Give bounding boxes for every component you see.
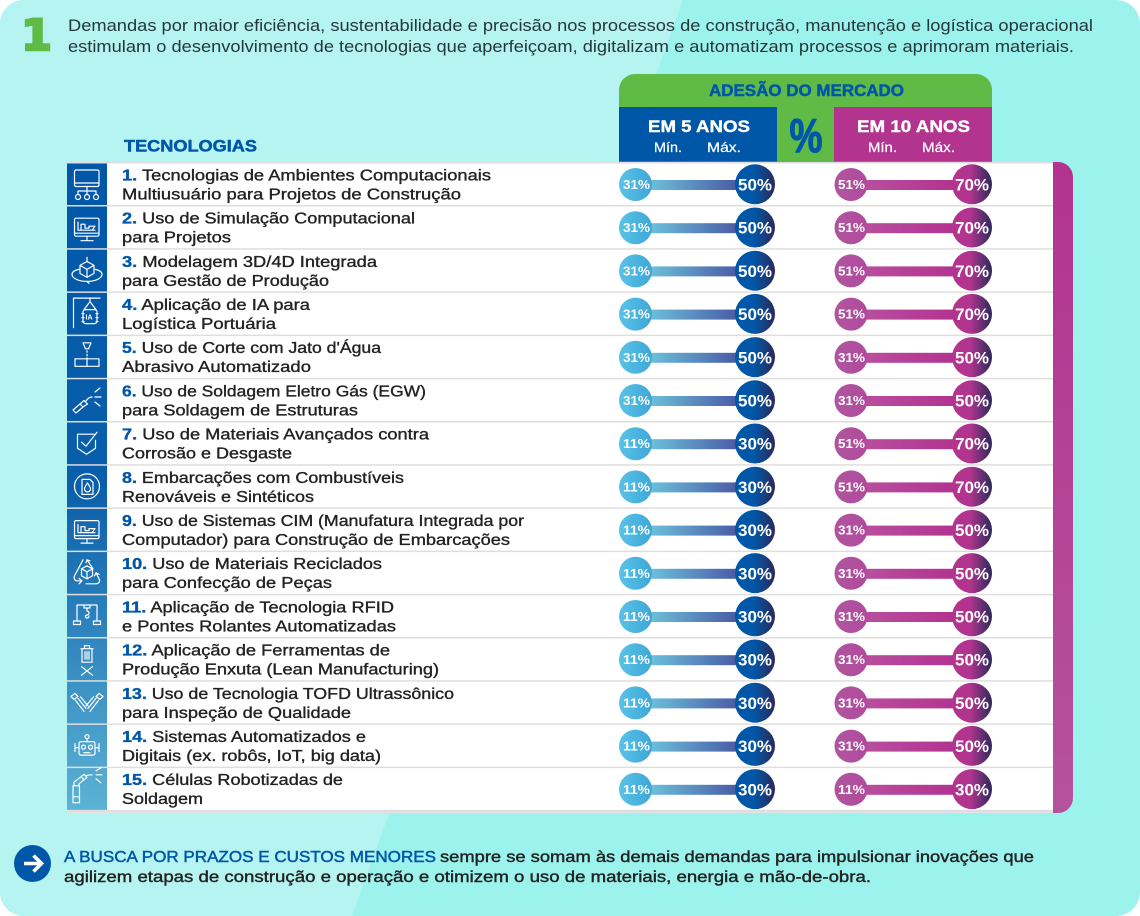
range 10 years: 70%	[955, 220, 989, 238]
label: technology 14: Digitais (ex. robôs, IoT, big data)	[122, 748, 381, 765]
range 5 years	[619, 553, 775, 593]
range 10 years: 50%	[955, 349, 989, 367]
range 5 years: 50%	[738, 392, 772, 410]
range 5 years: 31%	[623, 308, 650, 322]
icon: robotic welding arm	[73, 768, 102, 803]
column header: 5 years: Mín.	[654, 140, 682, 155]
range 10 years: 50%	[955, 695, 989, 713]
label: technology 1: 1. Tecnologias de Ambientes Computacionais	[122, 167, 491, 184]
range 5 years: 11%	[623, 567, 650, 581]
label: technology 9	[122, 513, 524, 549]
label: technology 3	[122, 254, 377, 290]
label: technology 11	[122, 599, 396, 635]
label: technology 12: Produção Enxuta (Lean Manufacturing)	[122, 662, 439, 679]
label: technology 4: Logística Portuária	[122, 316, 276, 333]
range 5 years	[619, 208, 775, 248]
range 10 years: 70%	[955, 176, 989, 194]
range 10 years: 51%	[838, 264, 865, 278]
range 5 years: 50%	[738, 263, 772, 281]
label: technology 2	[122, 211, 415, 247]
range 5 years: 30%	[738, 781, 772, 799]
range 10 years	[834, 467, 992, 507]
row 8	[74, 467, 992, 507]
row 9	[74, 510, 992, 550]
row 11	[74, 596, 992, 636]
icon: gantry crane hook	[74, 605, 100, 624]
label: technology 7: 7. Uso de Materiais Avançados contra	[122, 427, 429, 444]
label: technology 1	[122, 167, 491, 203]
row 12	[81, 640, 992, 680]
column header: 5 years: Máx.	[707, 140, 741, 155]
label: technology 9: 9. Uso de Sistemas CIM (Manufatura Integrada por	[122, 513, 524, 530]
footer callout: sempre se somam às demais demandas para impulsionar inovações que	[440, 849, 1034, 866]
range 5 years	[619, 424, 775, 464]
range 5 years: 30%	[738, 738, 772, 756]
label: technology 6	[122, 383, 426, 419]
row 4	[74, 294, 992, 334]
range 5 years: 50%	[738, 306, 772, 324]
row 5	[75, 337, 992, 377]
range 5 years	[619, 164, 775, 204]
column header: 5 years: EM 5 ANOS	[648, 117, 750, 136]
label: technology 11: 11. Aplicação de Tecnologia RFID	[122, 599, 394, 616]
icon: renewable fuel cycle	[74, 474, 100, 499]
label: technology 13: 13. Uso de Tecnologia TOFD Ultrassônico	[122, 686, 454, 703]
range 5 years: 30%	[738, 479, 772, 497]
range 10 years	[834, 380, 992, 420]
range 5 years: 31%	[623, 351, 650, 365]
range 5 years: 30%	[738, 695, 772, 713]
icon: simulation monitor	[74, 218, 99, 241]
label: technology 8	[122, 470, 404, 506]
icon: crossed-out trash can	[81, 646, 93, 675]
range 10 years: 50%	[955, 522, 989, 540]
row 1	[74, 164, 992, 204]
range 5 years	[619, 640, 775, 680]
range 5 years	[619, 510, 775, 550]
range 5 years: 30%	[738, 436, 772, 454]
icon: networked monitor	[74, 170, 99, 200]
range 5 years	[619, 769, 775, 809]
range 10 years	[834, 683, 992, 723]
range 10 years	[834, 424, 992, 464]
range 10 years: 31%	[838, 394, 865, 408]
icon: AI crane chip: IA	[86, 315, 92, 322]
icon: shield with check	[78, 432, 97, 454]
intro text: Demandas por maior eficiência, sustentabilidade e precisão nos processos de construção, manutenção e logística operacional	[68, 17, 1093, 35]
panel: table base	[67, 162, 1073, 813]
label: technology 8: Renováveis e Sintéticos	[122, 489, 314, 506]
label: technology 14: 14. Sistemas Automatizados e	[122, 729, 366, 746]
range 10 years: 31%	[838, 653, 865, 667]
row 6	[73, 380, 992, 420]
label: technology 2: 2. Uso de Simulação Computacional	[122, 211, 415, 228]
range 10 years	[834, 164, 992, 204]
footer callout	[64, 849, 1034, 886]
range 10 years: 31%	[838, 351, 865, 365]
range 10 years	[834, 208, 992, 248]
range 10 years	[834, 510, 992, 550]
range 5 years: 11%	[623, 653, 650, 667]
range 10 years	[834, 726, 992, 766]
range 5 years: 50%	[738, 220, 772, 238]
range 5 years: 30%	[738, 522, 772, 540]
range 5 years: 30%	[738, 608, 772, 626]
footer callout: A BUSCA POR PRAZOS E CUSTOS MENORES	[64, 849, 436, 866]
label: technology 6: 6. Uso de Soldagem Eletro Gás (EGW)	[122, 383, 426, 400]
heading: adesão do mercado: ADESÃO DO MERCADO	[709, 80, 904, 100]
icon: arrow in circle	[14, 845, 51, 882]
range 5 years: 11%	[623, 740, 650, 754]
range 5 years: 31%	[623, 394, 650, 408]
range 10 years: 31%	[838, 696, 865, 710]
range 5 years: 11%	[623, 696, 650, 710]
label: technology 10: 10. Uso de Materiais Reciclados	[122, 556, 382, 573]
range 10 years	[834, 769, 992, 809]
label: technology 5	[122, 340, 381, 376]
range 5 years	[619, 337, 775, 377]
section number: 1	[21, 11, 52, 61]
range 10 years	[834, 337, 992, 377]
label: technology 15: 15. Células Robotizadas de	[122, 772, 343, 789]
label: technology 8: 8. Embarcações com Combustíveis	[122, 470, 404, 487]
panel: market adoption header	[619, 74, 992, 162]
range 5 years	[619, 683, 775, 723]
label: technology 13: para Inspeção de Qualidade	[122, 705, 351, 722]
range 5 years: 11%	[623, 783, 650, 797]
range 5 years	[619, 251, 775, 291]
range 10 years: 51%	[838, 178, 865, 192]
range 10 years	[834, 251, 992, 291]
percent sign: %	[790, 109, 822, 162]
range 10 years: 31%	[838, 567, 865, 581]
label: technology 13	[122, 686, 454, 722]
range 10 years: 50%	[955, 652, 989, 670]
label: technology 6: para Soldagem de Estruturas	[122, 402, 358, 419]
label: technology 12	[122, 643, 439, 679]
row 14	[75, 726, 992, 766]
icon: recycling cube	[74, 560, 100, 584]
column header: 10 years	[834, 107, 992, 162]
footer callout: agilizem etapas de construção e operação e otimizem o uso de materiais, energia e mão-de-obra.	[64, 869, 871, 886]
range 5 years	[619, 596, 775, 636]
range 5 years: 31%	[623, 178, 650, 192]
icon: welding torch	[73, 388, 101, 413]
range 10 years: 50%	[955, 392, 989, 410]
intro text	[68, 17, 1093, 56]
range 5 years	[619, 294, 775, 334]
label: technology 7: Corrosão e Desgaste	[122, 446, 292, 463]
row 7	[78, 424, 992, 464]
label: technology 1: Multiusuário para Projetos de Construção	[122, 186, 461, 203]
range 10 years: 51%	[838, 480, 865, 494]
icon: water jet cutter	[75, 343, 99, 366]
icon: 3D cube on orbit	[72, 257, 102, 283]
label: technology 9: Computador) para Construção de Embarcações	[122, 532, 510, 549]
icon: CIM monitor	[74, 521, 99, 543]
label: technology 2: para Projetos	[122, 230, 231, 247]
label: technology 11: e Pontes Rolantes Automatizadas	[122, 618, 396, 635]
range 10 years: 50%	[955, 738, 989, 756]
range 10 years: 31%	[838, 524, 865, 538]
range 10 years: 31%	[838, 610, 865, 624]
label: technology 14	[122, 729, 381, 765]
label: technology 10	[122, 556, 382, 592]
range 5 years: 11%	[623, 437, 650, 451]
range 5 years: 11%	[623, 480, 650, 494]
range 10 years: 51%	[838, 221, 865, 235]
label: technology 5: 5. Uso de Corte com Jato d'Água	[122, 340, 381, 357]
range 10 years	[834, 294, 992, 334]
label: technology 4	[122, 297, 310, 333]
icon: ultrasonic probes	[71, 693, 103, 711]
label: technology 4: 4. Aplicação de IA para	[122, 297, 310, 314]
range 10 years: 11%	[838, 783, 865, 797]
range 10 years: 70%	[955, 479, 989, 497]
label: technology 3: 3. Modelagem 3D/4D Integrada	[122, 254, 377, 271]
range 10 years	[834, 553, 992, 593]
label: technology 5: Abrasivo Automatizado	[122, 359, 311, 376]
range 10 years	[834, 640, 992, 680]
row 2	[74, 208, 992, 248]
range 10 years: 70%	[955, 306, 989, 324]
label: technology 15	[122, 772, 343, 808]
label: technology 7	[122, 427, 429, 463]
range 10 years: 70%	[955, 263, 989, 281]
range 10 years: 31%	[838, 740, 865, 754]
range 5 years	[619, 467, 775, 507]
heading: tecnologias: TECNOLOGIAS	[124, 136, 257, 156]
row 13	[71, 683, 992, 723]
icon: robot head	[75, 735, 99, 755]
range 5 years: 50%	[738, 176, 772, 194]
label: technology 10: para Confecção de Peças	[122, 575, 332, 592]
range 10 years: 50%	[955, 565, 989, 583]
label: technology 3: para Gestão de Produção	[122, 273, 329, 290]
label: technology 12: 12. Aplicação de Ferramentas de	[122, 643, 390, 660]
row 10	[74, 553, 992, 593]
column header: 10 years: Máx.	[922, 140, 955, 155]
range 5 years: 31%	[623, 264, 650, 278]
range 5 years: 30%	[738, 565, 772, 583]
range 10 years: 51%	[838, 308, 865, 322]
range 5 years: 11%	[623, 524, 650, 538]
label: technology 15: Soldagem	[122, 791, 203, 808]
range 5 years	[619, 380, 775, 420]
range 5 years: 31%	[623, 221, 650, 235]
range 10 years	[834, 596, 992, 636]
row 3	[72, 251, 992, 291]
range 10 years: 70%	[955, 436, 989, 454]
column header: 10 years: Mín.	[868, 140, 897, 155]
range 5 years: 11%	[623, 610, 650, 624]
column header: 10 years: EM 10 ANOS	[857, 117, 970, 136]
range 10 years: 30%	[955, 781, 989, 799]
column header: 5 years	[619, 107, 777, 162]
icon: AI crane chip	[74, 298, 100, 328]
range 5 years	[619, 726, 775, 766]
range 5 years: 50%	[738, 349, 772, 367]
range 10 years: 50%	[955, 608, 989, 626]
range 10 years: 51%	[838, 437, 865, 451]
intro text: estimulam o desenvolvimento de tecnologias que aperfeiçoam, digitalizam e automatizam processos e aprimoram materiais.	[68, 38, 1074, 56]
row 15	[73, 768, 992, 809]
range 5 years: 30%	[738, 652, 772, 670]
